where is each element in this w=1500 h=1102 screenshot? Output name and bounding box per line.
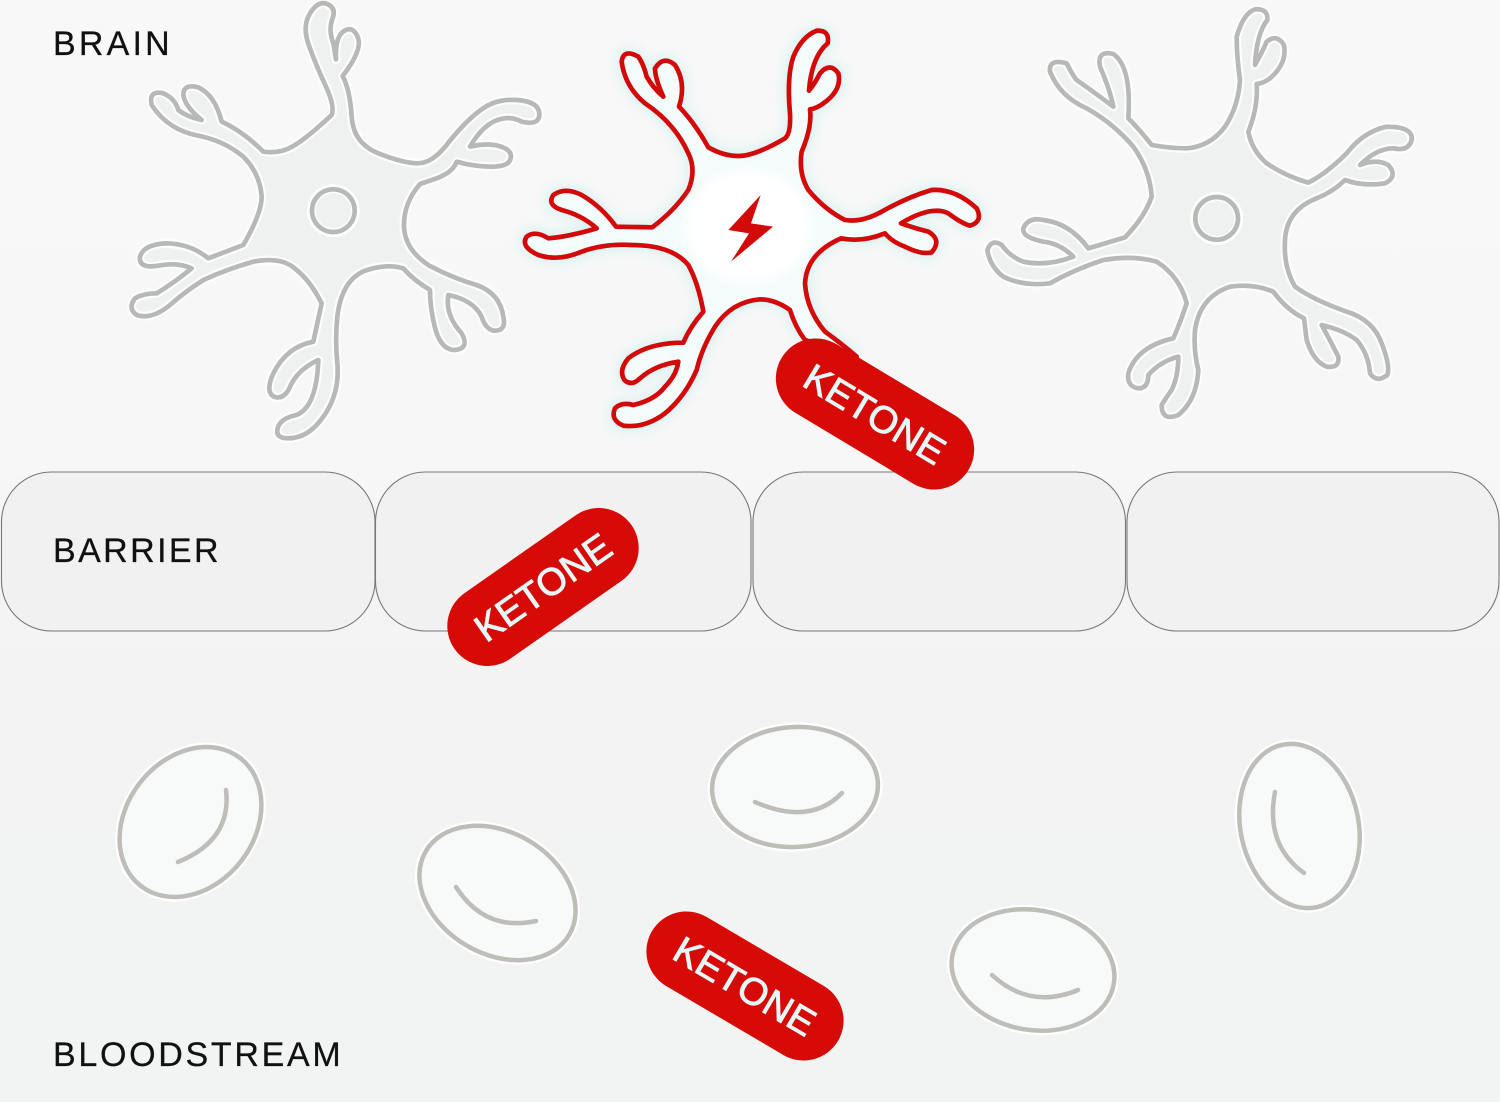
label: bloodstream: BLOODSTREAM xyxy=(53,1036,343,1074)
icon: active red neuron xyxy=(525,31,979,426)
ketone pill: entering neuron: KETONE xyxy=(796,357,952,474)
panel: barrier cells xyxy=(2,472,1499,631)
ketone pill: crossing barrier: KETONE xyxy=(467,526,620,651)
ketone pill: in bloodstream xyxy=(632,897,858,1075)
ketone pill: entering neuron xyxy=(761,324,989,504)
ketone pill: in bloodstream: KETONE xyxy=(666,929,823,1045)
blood cell 4 xyxy=(942,897,1124,1043)
blood cell 2 xyxy=(395,799,600,987)
blood cell 1 xyxy=(90,719,291,925)
blood cell 5 xyxy=(1225,733,1374,919)
label: barrier: BARRIER xyxy=(53,532,221,570)
icon: left grey neuron xyxy=(132,3,539,438)
ketone pill: crossing barrier xyxy=(432,492,654,682)
label: brain: BRAIN xyxy=(53,25,173,63)
blood cell 3 xyxy=(709,723,881,851)
icon: right grey neuron xyxy=(987,9,1412,417)
